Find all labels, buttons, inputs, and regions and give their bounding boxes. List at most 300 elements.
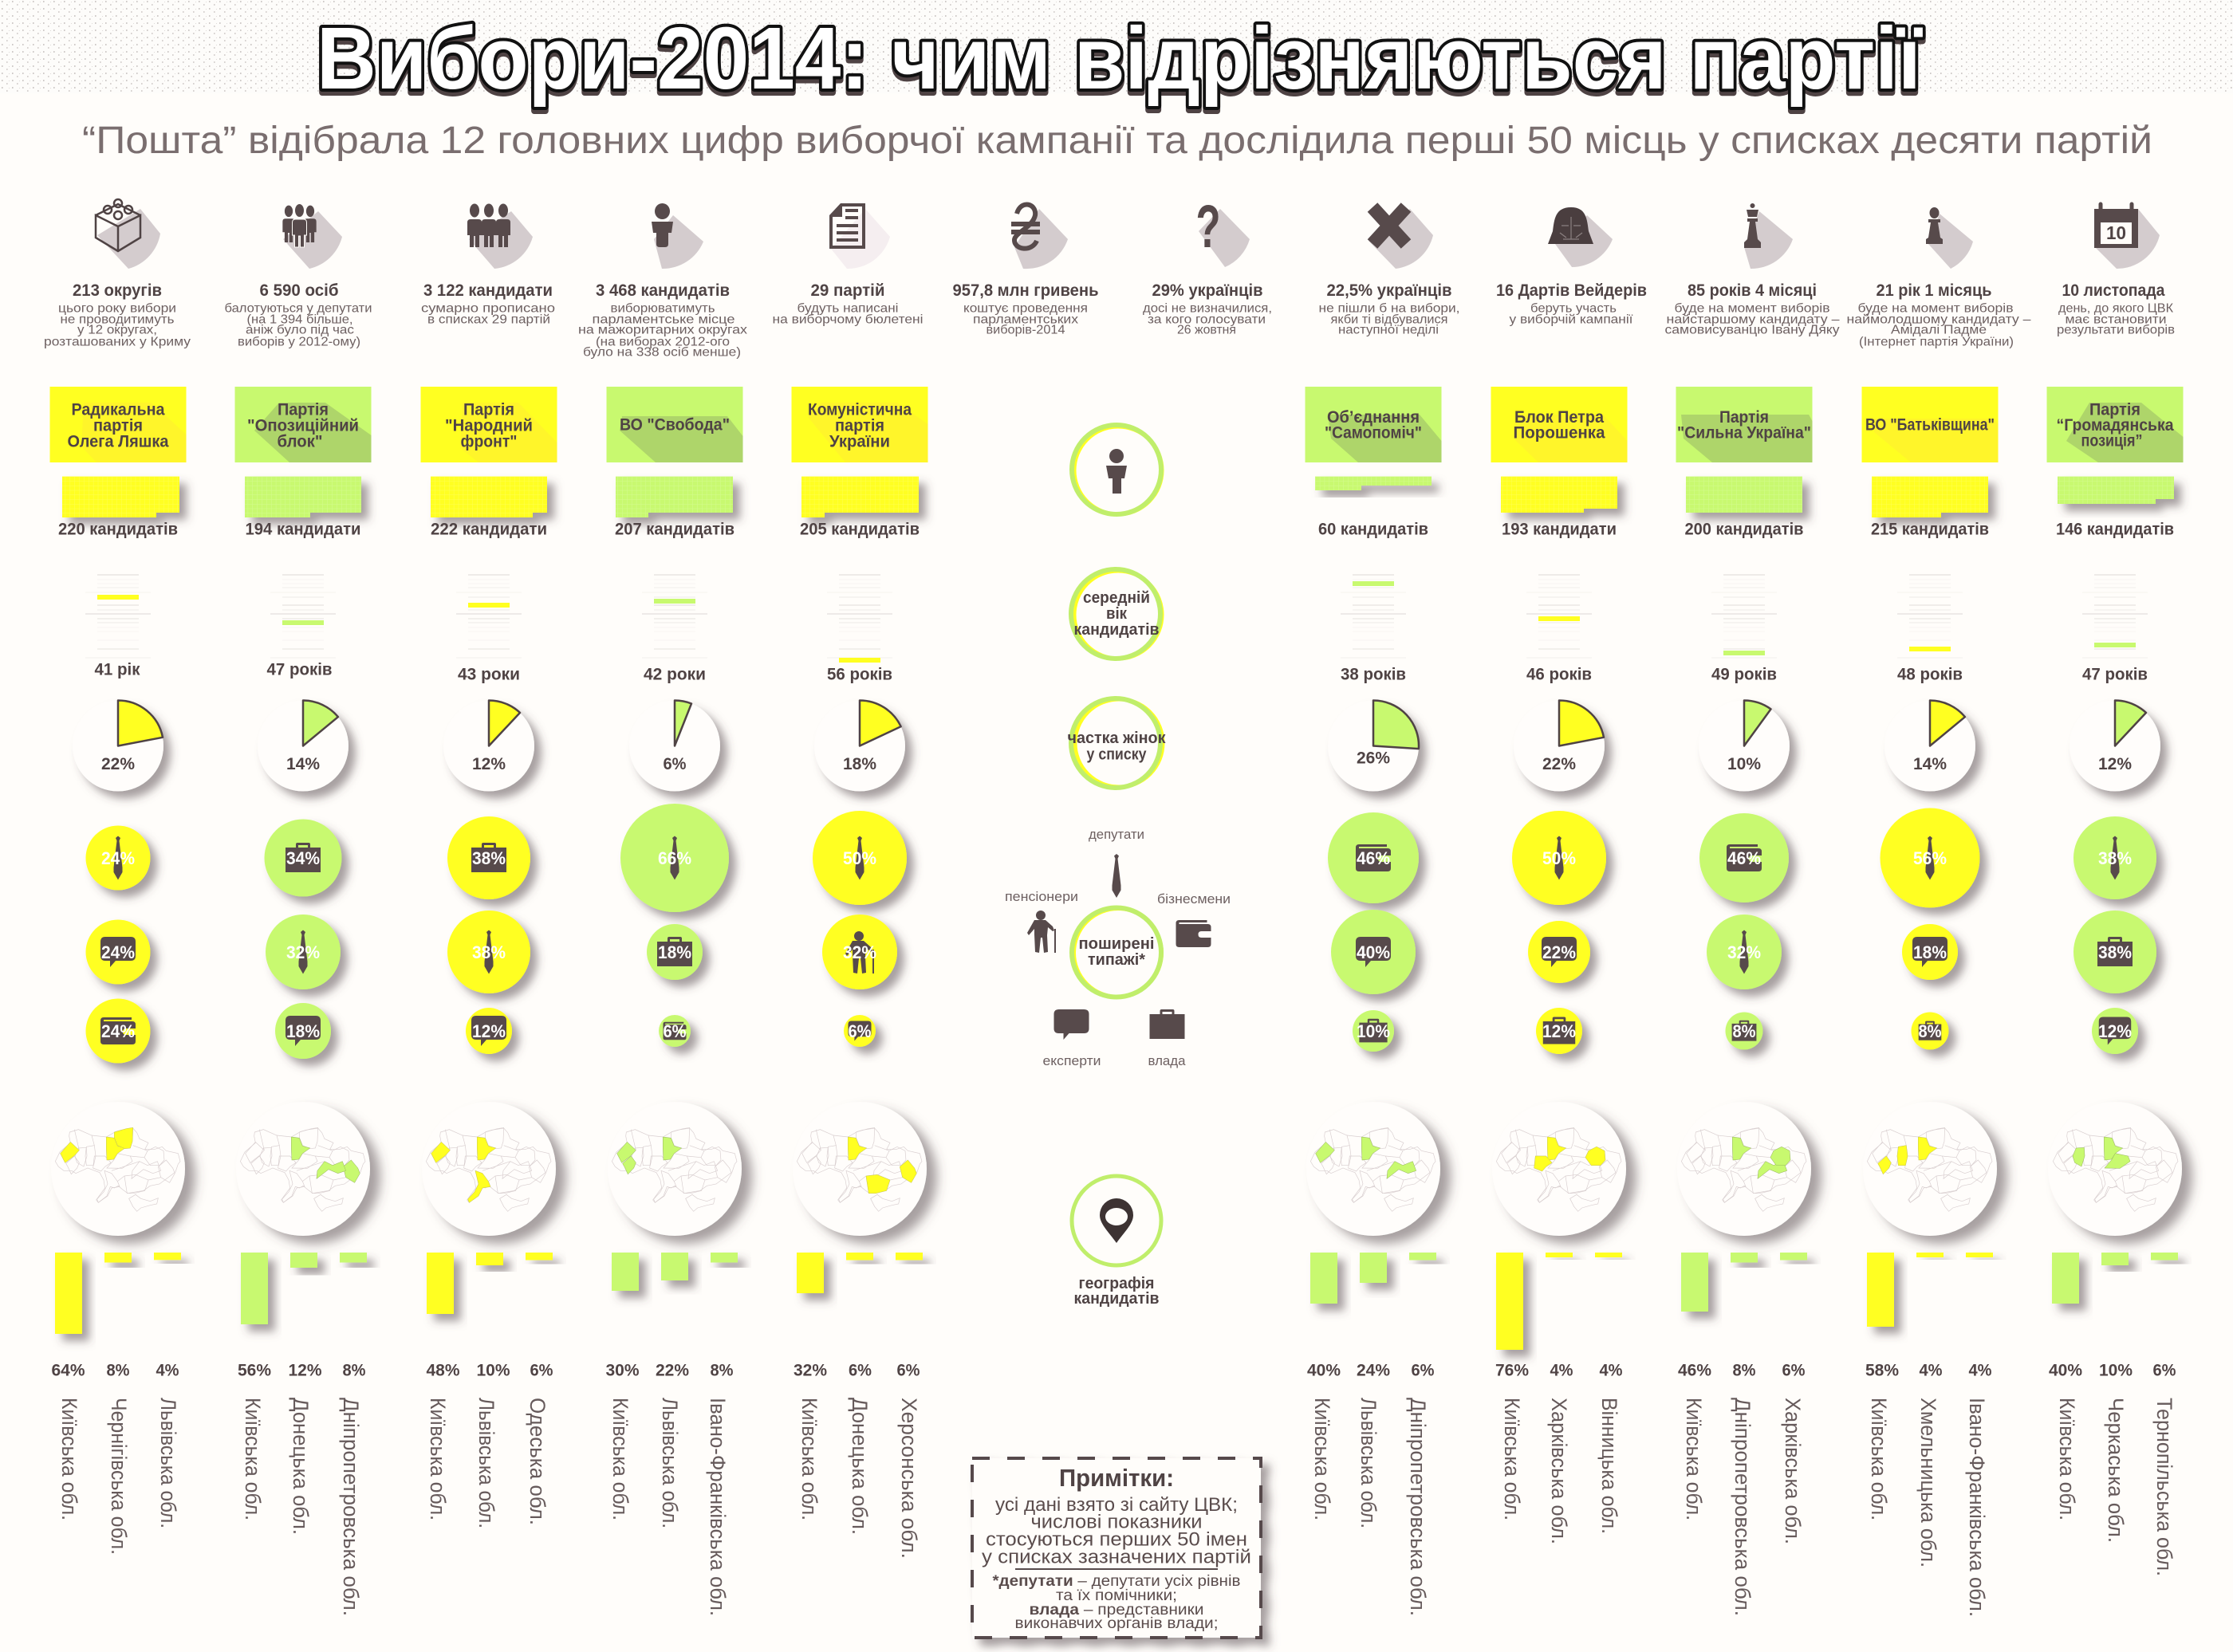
regions: Опозиційний блок: 8% — [343, 1362, 366, 1379]
figure: 22,5% українців: наступної неділі — [1338, 324, 1439, 336]
type: влада — [1148, 1009, 1186, 1068]
regions: Комуністична партія: 6% — [849, 1362, 872, 1379]
party box: Радикальна партія: партія — [93, 416, 143, 435]
regions: Блок Петра Порошенка: Вінницька обл. — [1597, 1398, 1621, 1534]
figure: 16 Дартів Вейдерів: 16 Дартів Вейдерів — [1496, 281, 1647, 300]
party box: Блок Петра Порошенка: Блок Петра — [1514, 408, 1604, 427]
party box: Комуністична партія: партія — [835, 416, 884, 435]
party box: Громадянська позиція — [2046, 387, 2184, 462]
pie: 22%: 22% — [101, 755, 135, 773]
waffle: 220 кандидатів: 220 кандидатів — [58, 520, 178, 539]
pie: 10% — [1699, 700, 1790, 791]
map: Самопоміч — [1306, 1102, 1440, 1236]
regions: Свобода: Івано-Франківська обл. — [706, 1398, 730, 1616]
row: share of women pies — [73, 700, 2160, 791]
waffle: 146 кандидатів — [2056, 477, 2174, 539]
bubbles: Блок Петра Порошенка: 22% — [1542, 942, 1576, 962]
regions: Громадянська позиція: Тернопільська обл. — [2152, 1398, 2176, 1576]
waffle: 220 кандидатів — [58, 477, 179, 539]
bubbles: Самопоміч — [1328, 812, 1419, 1052]
bubbles: Громадянська позиція — [2074, 816, 2156, 1054]
notes footnote: влада – представники — [1029, 1602, 1204, 1619]
figure: 3 468 кандидатів: парламентське місце — [592, 313, 735, 327]
figure: 6 590 осіб: виборів у 2012-ому) — [238, 335, 360, 349]
bubbles: Народний фронт — [447, 816, 530, 1054]
pie: 14% — [258, 700, 349, 791]
bubbles: Сильна Україна: 8% — [1732, 1021, 1756, 1041]
waffle: 200 кандидатів: 200 кандидатів — [1684, 520, 1804, 539]
figure: 957,8 млн гривень: коштує проведення — [963, 301, 1088, 316]
map: Свобода — [608, 1102, 742, 1236]
waffle: 193 кандидати — [1501, 477, 1617, 539]
notes body: стосуються перших 50 імен — [986, 1529, 1247, 1550]
party box: Блок Петра Порошенка: Порошенка — [1514, 424, 1605, 442]
regions: Опозиційний блок: 56% — [238, 1362, 271, 1379]
notes footnote: виконавчих органів влади; — [1014, 1615, 1219, 1632]
figure: 21 рік 1 місяць: 21 рік 1 місяць — [1876, 281, 1992, 300]
bubbles: Комуністична партія: 50% — [843, 848, 876, 868]
party box: Радикальна партія: Радикальна — [72, 400, 165, 419]
figure: 29% українців — [1143, 193, 1272, 336]
map: Комуністична партія — [793, 1102, 927, 1236]
party box: Громадянська позиція: “Громадянська — [2056, 416, 2174, 435]
notes footnote: та їх помічники; — [1056, 1587, 1177, 1604]
waffle: 215 кандидатів — [1871, 477, 1989, 539]
regions: Самопоміч: 40% — [1307, 1362, 1341, 1379]
row: region bars, percentages and names — [51, 1253, 2178, 1617]
figure: 10 листопада: має встановити — [2066, 313, 2166, 327]
bubbles: Народний фронт: 38% — [472, 942, 506, 962]
legend: average age circle: середній — [1083, 589, 1150, 607]
figure: 6 590 осіб: (на 1 394 більше, — [247, 313, 352, 327]
bubbles: Опозиційний блок: 18% — [286, 1021, 320, 1041]
bubbles: Опозиційний блок: 32% — [286, 942, 320, 962]
figure: 10 листопада — [2057, 204, 2175, 336]
waffle: 207 кандидатів — [615, 477, 734, 539]
party box: Батьківщина — [1861, 387, 1999, 462]
bubbles: Сильна Україна: 32% — [1727, 942, 1761, 962]
pie: 12% — [2070, 700, 2160, 791]
party box: Опозиційний блок: блок" — [278, 432, 322, 451]
regions: Свобода — [606, 1253, 738, 1616]
regions: Самопоміч: 24% — [1357, 1362, 1390, 1379]
regions: Радикальна партія: 8% — [107, 1362, 130, 1379]
pie: 14%: 14% — [286, 755, 320, 773]
regions: Комуністична партія: Київська обл. — [798, 1398, 821, 1520]
pie: 22% — [73, 700, 163, 791]
regions: Радикальна партія: Львівська обл. — [156, 1398, 180, 1528]
party box: Опозиційний блок: Партія — [278, 400, 329, 419]
waffle: 207 кандидатів: 207 кандидатів — [615, 520, 734, 539]
party box: Народний фронт: фронт" — [461, 432, 517, 451]
pie: 14%: 14% — [1913, 755, 1947, 773]
figure: 6 590 осіб: аніж було під час — [246, 324, 354, 336]
regions: Опозиційний блок: Дніпропетровська обл. — [339, 1398, 363, 1616]
legend: average age circle: вік — [1106, 605, 1128, 623]
age scale: 56 років: 56 років — [827, 665, 892, 684]
figure: 29 партій: 29 партій — [810, 281, 885, 300]
bubbles: Комуністична партія: 6% — [849, 1021, 871, 1041]
map: Громадянська позиція — [2048, 1102, 2182, 1236]
figure: 29 партій: на виборчому бюлетені — [772, 313, 924, 327]
bubbles: Свобода: 6% — [664, 1021, 686, 1041]
bubbles: Сильна Україна: 46% — [1727, 848, 1761, 868]
party box: Народний фронт: "Народний — [445, 416, 533, 435]
type: бізнесмени: бізнесмени — [1157, 891, 1231, 907]
map: Народний фронт — [422, 1102, 556, 1236]
age scale: 56 років — [827, 575, 892, 684]
age scale: 49 років — [1711, 575, 1777, 684]
age scale: 46 років — [1526, 575, 1592, 684]
party box: Опозиційний блок — [234, 387, 372, 462]
pie: 26%: 26% — [1357, 749, 1390, 767]
type: бізнесмени — [1157, 891, 1231, 947]
age scale: 42 роки: 42 роки — [644, 665, 706, 684]
figure: 10 листопада: день, до якого ЦВК — [2058, 301, 2174, 316]
regions: Батьківщина: Івано-Франківська обл. — [1965, 1398, 1989, 1617]
waffle: 222 кандидати — [431, 477, 547, 539]
party box: Сильна Україна — [1676, 387, 1812, 462]
regions: Блок Петра Порошенка: 4% — [1550, 1362, 1573, 1379]
legend: common candidate types: поширені — [1078, 935, 1155, 953]
figure: 29% українців: досі не визначилися, — [1143, 301, 1272, 316]
regions: Батьківщина: 4% — [1968, 1362, 1992, 1379]
bubbles: Свобода — [620, 804, 729, 1047]
age scale: 47 років: 47 років — [266, 660, 333, 679]
figure: 29 партій: будуть написані — [798, 301, 898, 316]
type: експерти — [1043, 1009, 1101, 1068]
pie: 10%: 10% — [1727, 755, 1761, 773]
regions: Громадянська позиція: Черкаська обл. — [2104, 1398, 2128, 1543]
waffle: 222 кандидати: 222 кандидати — [431, 520, 547, 539]
regions: Радикальна партія — [51, 1253, 181, 1555]
figure: 3 468 кандидатів: 3 468 кандидатів — [596, 281, 730, 300]
regions: Радикальна партія: 64% — [51, 1362, 85, 1379]
age scale: 47 років: 47 років — [2082, 665, 2148, 684]
party box: Комуністична партія: України — [829, 432, 890, 451]
bubbles: Опозиційний блок: 34% — [286, 848, 320, 868]
figure: 3 468 кандидатів — [578, 203, 747, 359]
bubbles: Радикальна партія: 24% — [101, 942, 135, 962]
regions: Комуністична партія: Донецька обл. — [848, 1398, 872, 1535]
legend: geography: кандидатів — [1073, 1290, 1160, 1308]
age scale: 43 роки: 43 роки — [458, 665, 520, 684]
regions: Громадянська позиція: 6% — [2153, 1362, 2176, 1379]
regions: Батьківщина: 58% — [1865, 1362, 1899, 1379]
row: number of candidates waffle bars — [58, 477, 2174, 539]
regions: Сильна Україна: Дніпропетровська обл. — [1731, 1398, 1754, 1616]
regions: Громадянська позиція: Київська обл. — [2055, 1398, 2079, 1520]
waffle: 215 кандидатів: 215 кандидатів — [1871, 520, 1989, 539]
notes body — [982, 1494, 1251, 1569]
figure: 213 округів — [44, 199, 191, 349]
regions: Самопоміч: Київська обл. — [1310, 1398, 1334, 1520]
regions: Самопоміч: Львівська обл. — [1357, 1398, 1380, 1528]
regions: Сильна Україна: 8% — [1732, 1362, 1756, 1379]
regions: Народний фронт: 6% — [530, 1362, 553, 1379]
party box: Самопоміч: "Самопоміч" — [1325, 424, 1422, 442]
notes body: числові показники — [1030, 1512, 1203, 1532]
legend: share of women circle: у списку — [1086, 746, 1147, 764]
age scale: 43 роки — [456, 575, 522, 684]
figure: 6 590 осіб: 6 590 осіб — [260, 281, 339, 300]
figure: 22,5% українців: 22,5% українців — [1327, 281, 1452, 300]
map: Батьківщина — [1863, 1102, 1997, 1236]
party box: Свобода: ВО "Свобода" — [620, 416, 730, 434]
waffle: 146 кандидатів: 146 кандидатів — [2056, 520, 2174, 539]
regions: Блок Петра Порошенка: 76% — [1495, 1362, 1529, 1379]
row: candidate types bubbles — [86, 804, 2156, 1064]
regions: Свобода: 8% — [710, 1362, 734, 1379]
figure: 29% українців: ? — [1196, 193, 1220, 261]
figure: 22,5% українців: якби ті відбувалися — [1330, 313, 1448, 327]
regions: Народний фронт: Київська обл. — [426, 1398, 450, 1520]
regions: Батьківщина: Київська обл. — [1867, 1398, 1891, 1520]
row: geography maps — [51, 1102, 2182, 1236]
bubbles: Самопоміч: 46% — [1357, 848, 1390, 868]
figure: 85 років 4 місяці: найстаршому кандидату – — [1667, 313, 1840, 327]
map: Опозиційний блок — [236, 1102, 370, 1236]
figure: 29% українців: 29% українців — [1152, 281, 1263, 300]
figure: 957,8 млн гривень: парламентських — [973, 313, 1078, 327]
regions: Опозиційний блок: Донецька обл. — [289, 1398, 313, 1535]
regions: Блок Петра Порошенка: 4% — [1600, 1362, 1623, 1379]
regions: Сильна Україна: Харківська обл. — [1781, 1398, 1805, 1544]
waffle: 200 кандидатів — [1684, 477, 1804, 539]
regions: Громадянська позиція: 10% — [2099, 1362, 2133, 1379]
figure: 22,5% українців — [1319, 207, 1459, 336]
regions: Радикальна партія: 4% — [156, 1362, 179, 1379]
regions: Батьківщина: Хмельницька обл. — [1916, 1398, 1940, 1567]
regions: Блок Петра Порошенка: Харківська обл. — [1547, 1398, 1571, 1544]
legend: geography — [1072, 1176, 1161, 1308]
pie: 12% — [443, 700, 534, 791]
party box: Самопоміч — [1305, 387, 1442, 462]
regions: Народний фронт: Львівська обл. — [475, 1398, 498, 1528]
figure: 85 років 4 місяці: буде на момент виборів — [1675, 301, 1829, 316]
legend: geography: географія — [1078, 1275, 1155, 1292]
regions: Радикальна партія: Київська обл. — [57, 1398, 81, 1520]
pie: 6% — [629, 700, 720, 791]
figure: 3 122 кандидати: в списках 29 партій — [427, 313, 550, 327]
figure: 21 рік 1 місяць: Амідалі Падме — [1891, 324, 1987, 336]
waffle: 194 кандидати: 194 кандидати — [246, 520, 360, 539]
party box: Радикальна партія: Олега Ляшка — [67, 432, 169, 451]
waffle: 193 кандидати: 193 кандидати — [1502, 520, 1617, 539]
figure: 29 партій — [772, 203, 924, 327]
legend: candidates icon circle — [1072, 425, 1162, 514]
regions: Самопоміч — [1307, 1253, 1436, 1616]
notes body: усі дані взято зі сайту ЦВК; — [995, 1494, 1238, 1516]
map: Блок Петра Порошенка — [1492, 1102, 1626, 1236]
figure: 3 468 кандидатів: (на виборах 2012-ого — [596, 335, 730, 349]
waffle: 60 кандидатів: 60 кандидатів — [1318, 520, 1428, 539]
figure: 16 Дартів Вейдерів — [1496, 207, 1647, 327]
age scale: 42 роки — [642, 575, 707, 684]
figure: 3 122 кандидати — [421, 204, 555, 327]
age scale: 49 років: 49 років — [1711, 665, 1777, 684]
regions: Самопоміч: Дніпропетровська обл. — [1406, 1398, 1430, 1616]
regions: Свобода: Львівська обл. — [658, 1398, 682, 1528]
pie: 12%: 12% — [472, 755, 506, 773]
legend: share of women circle: частка жінок — [1067, 730, 1166, 747]
age scale: 48 років: 48 років — [1897, 665, 1963, 684]
regions: Сильна Україна: 6% — [1782, 1362, 1806, 1379]
bubbles: Блок Петра Порошенка — [1512, 811, 1606, 1054]
figure: 29% українців: за кого голосувати — [1148, 313, 1266, 327]
figure: 3 468 кандидатів: на мажоритарних округах — [578, 324, 747, 336]
bubbles: Самопоміч: 40% — [1357, 942, 1390, 962]
party box: Свобода — [606, 387, 743, 462]
party box: Комуністична партія: Комуністична — [808, 400, 912, 419]
pie: 18%: 18% — [843, 755, 876, 773]
type: депутати — [1089, 827, 1144, 898]
party box: Народний фронт — [421, 387, 557, 462]
type: депутати: депутати — [1089, 827, 1144, 842]
age scale: 38 років: 38 років — [1341, 665, 1406, 684]
bubbles: Сильна Україна — [1699, 813, 1789, 1049]
regions: Свобода: Київська обл. — [608, 1398, 632, 1520]
title: Вибори-2014: чим відрізняються партії — [317, 10, 1923, 108]
age scale: 47 років — [2082, 575, 2148, 684]
regions: Опозиційний блок: 12% — [289, 1362, 322, 1379]
figure: 21 рік 1 місяць: буде на момент виборів — [1858, 301, 2013, 316]
figure: 21 рік 1 місяць — [1847, 207, 2031, 349]
age scale: 41 рік — [85, 575, 151, 679]
figure: 957,8 млн гривень: виборів-2014 — [986, 324, 1065, 336]
figure: 6 590 осіб: балотуються у депутати — [225, 301, 372, 316]
figure: 213 округів: не проводитимуть — [61, 313, 174, 327]
party box: Опозиційний блок: "Опозиційний — [247, 416, 359, 435]
bubbles: Народний фронт: 12% — [472, 1021, 506, 1041]
pie: 22% — [1514, 700, 1605, 791]
waffle: 60 кандидатів — [1315, 477, 1432, 539]
age scale: 41 рік: 41 рік — [94, 660, 140, 679]
bubbles: Батьківщина: 8% — [1919, 1021, 1941, 1041]
legend: average age circle — [1071, 569, 1162, 659]
map: Сильна Україна — [1677, 1102, 1811, 1236]
figure: 10 листопада: 10 листопада — [2062, 281, 2165, 300]
regions: Народний фронт: 10% — [477, 1362, 510, 1379]
age scale: 46 років: 46 років — [1526, 665, 1592, 684]
regions: Сильна Україна: Київська обл. — [1682, 1398, 1706, 1520]
bubbles: Блок Петра Порошенка: 50% — [1542, 848, 1576, 868]
pie: 6%: 6% — [664, 755, 687, 773]
bubbles: Батьківщина — [1881, 808, 1979, 1049]
pie: 26% — [1328, 700, 1419, 791]
regions: Опозиційний блок — [238, 1253, 367, 1616]
regions: Комуністична партія: 32% — [794, 1362, 827, 1379]
age scale: 48 років — [1897, 575, 1963, 684]
legend: common candidate types — [1005, 827, 1231, 1068]
regions: Свобода: 22% — [656, 1362, 689, 1379]
type: пенсіонери: пенсіонери — [1005, 889, 1078, 904]
bubbles: Опозиційний блок — [265, 820, 341, 1059]
bubbles: Свобода: 66% — [658, 848, 691, 868]
pie: 14% — [1884, 700, 1975, 791]
figure: 85 років 4 місяці: 85 років 4 місяці — [1688, 281, 1817, 300]
bubbles: Громадянська позиція: 38% — [2098, 848, 2132, 868]
type: експерти: експерти — [1043, 1053, 1101, 1068]
regions: Свобода: 30% — [606, 1362, 640, 1379]
legend: share of women circle — [1067, 698, 1166, 788]
waffle: 205 кандидатів: 205 кандидатів — [800, 520, 920, 539]
regions: Блок Петра Порошенка: Київська обл. — [1500, 1398, 1524, 1520]
regions: Сильна Україна — [1678, 1253, 1807, 1616]
bubbles: Блок Петра Порошенка: 12% — [1542, 1021, 1576, 1041]
figure: 6 590 осіб — [225, 204, 372, 349]
party box: Народний фронт: Партія — [463, 400, 514, 419]
party box: Батьківщина: ВО "Батьківщина" — [1865, 416, 1995, 434]
bubbles: Батьківщина: 18% — [1913, 942, 1947, 962]
figure: 213 округів: розташованих у Криму — [44, 335, 191, 349]
title: Вибори-2014: чим відрізняються партії — [317, 14, 1923, 112]
regions: Батьківщина — [1865, 1253, 1993, 1617]
bubbles: Громадянська позиція: 12% — [2098, 1021, 2132, 1041]
regions: Комуністична партія: Херсонська обл. — [897, 1398, 921, 1559]
figure: 3 468 кандидатів: виборюватимуть — [611, 301, 715, 316]
bubbles: Радикальна партія — [86, 826, 150, 1064]
figure: 22,5% українців: не пішли б на вибори, — [1319, 301, 1459, 316]
type: влада: влада — [1148, 1053, 1186, 1068]
bubbles: Народний фронт: 38% — [472, 848, 506, 868]
bubbles: Радикальна партія: 24% — [101, 848, 135, 868]
regions: Народний фронт: 48% — [426, 1362, 460, 1379]
figure: 3 122 кандидати: сумарно прописано — [421, 301, 555, 316]
regions: Блок Петра Порошенка — [1495, 1253, 1623, 1544]
party box: Самопоміч: Об’єднання — [1327, 408, 1420, 427]
figure: 213 округів: у 12 округах, — [77, 324, 157, 336]
figure: 16 Дартів Вейдерів: беруть участь — [1530, 301, 1617, 316]
bubbles: Комуністична партія — [813, 811, 907, 1047]
party box: Комуністична партія — [791, 387, 928, 462]
regions: Громадянська позиція — [2049, 1253, 2178, 1576]
regions: Опозиційний блок: Київська обл. — [241, 1398, 265, 1520]
legend: common candidate types: типажі* — [1088, 951, 1145, 969]
bubbles: Самопоміч: 10% — [1357, 1021, 1390, 1041]
party box: Блок Петра Порошенка — [1491, 387, 1627, 462]
figure: 213 округів: 213 округів — [73, 281, 162, 300]
figure: 85 років 4 місяці: самовисуванцю Івану Дяку — [1665, 324, 1839, 336]
subtitle: “Пошта” відібрала 12 головних цифр виборчої кампанії та дослідила перші 50 місць у списках десяти партій — [82, 120, 2152, 162]
figure: 85 років 4 місяці — [1665, 203, 1840, 336]
figure: 10 листопада: результати виборів — [2057, 324, 2175, 336]
figure: 21 рік 1 місяць: (Інтернет партія України) — [1859, 335, 2014, 349]
legend: average age circle: кандидатів — [1073, 621, 1160, 639]
bubbles: Батьківщина: 56% — [1913, 848, 1947, 868]
figure: 213 округів: цього року вибори — [58, 301, 176, 316]
regions: Батьківщина: 4% — [1919, 1362, 1943, 1379]
figure: 957,8 млн гривень — [952, 204, 1099, 336]
bubbles: Громадянська позиція: 38% — [2098, 942, 2132, 962]
party box: Сильна Україна: Партія — [1719, 408, 1769, 427]
row: twelve key figures — [44, 193, 2175, 359]
regions: Народний фронт — [426, 1253, 553, 1528]
regions: Комуністична партія — [794, 1253, 923, 1559]
regions: Народний фронт: Одеська обл. — [526, 1398, 549, 1525]
waffle: 205 кандидатів — [800, 477, 920, 539]
notes footnote: *депутати – депутати усіх рівнів — [992, 1573, 1241, 1590]
regions: Радикальна партія: Чернігівська обл. — [107, 1398, 131, 1555]
figure: 957,8 млн гривень: 957,8 млн гривень — [952, 281, 1099, 300]
regions: Сильна Україна: 46% — [1678, 1362, 1711, 1379]
figure: 10 листопада: 10 — [2106, 222, 2126, 243]
age scale: 47 років — [266, 575, 336, 679]
figure: 29% українців: 26 жовтня — [1177, 324, 1236, 336]
figure: 3 468 кандидатів: було на 338 осіб менше) — [583, 346, 741, 359]
figure: 21 рік 1 місяць: наймолодшому кандидату – — [1847, 313, 2031, 327]
bubbles: Комуністична партія: 32% — [843, 942, 876, 962]
